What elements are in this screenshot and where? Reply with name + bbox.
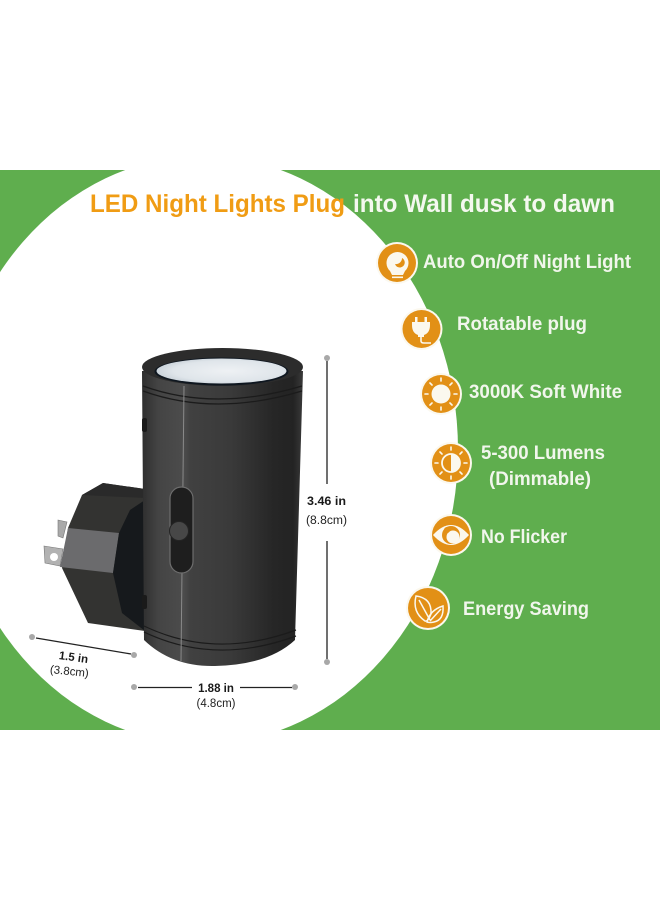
top rim and lens — [142, 348, 303, 386]
title: into Wall dusk to dawn — [353, 190, 615, 218]
label: 3000K Soft White — [469, 382, 622, 403]
icon: eye — [430, 514, 472, 556]
icon: plug — [400, 308, 442, 350]
dimension: width 1.88 in — [131, 683, 298, 710]
green background band — [0, 170, 660, 730]
icon: bulb with moon — [376, 242, 418, 284]
feature: rotatable plug — [400, 308, 587, 350]
icon: sun — [420, 373, 462, 415]
feature: no flicker — [430, 514, 568, 556]
label: Energy Saving — [463, 599, 589, 620]
dimension: height 3.46 in: 3.46 in — [307, 496, 346, 508]
side screws — [142, 418, 147, 609]
white oval backdrop — [0, 156, 458, 744]
icon: leaves — [406, 586, 450, 630]
feature: soft white — [420, 373, 622, 415]
feature: lumens — [430, 442, 605, 490]
feature: energy saving — [406, 586, 589, 630]
dimension: width 1.88 in: (4.8cm) — [197, 698, 236, 710]
slider slot and knob — [170, 487, 193, 573]
octagonal plug base — [60, 483, 145, 631]
seam — [181, 386, 184, 661]
label: Rotatable plug — [457, 314, 587, 335]
title: LED Night Lights Plug — [90, 190, 345, 218]
dimension: depth 1.5 in — [29, 634, 137, 680]
feature: lumens: (Dimmable) — [489, 469, 591, 490]
product: plug-in night light — [44, 348, 303, 666]
dimension: depth 1.5 in: (3.8cm) — [49, 664, 89, 680]
feature: auto on/off — [376, 242, 632, 284]
label: 5-300 Lumens — [481, 443, 605, 464]
title — [90, 190, 615, 218]
dimension: depth 1.5 in: 1.5 in — [58, 650, 89, 666]
dimension: width 1.88 in: 1.88 in — [198, 683, 234, 695]
dimension: height 3.46 in: (8.8cm) — [306, 515, 347, 527]
cylinder body — [142, 371, 303, 666]
icon: half sun — [430, 442, 472, 484]
prongs — [44, 520, 67, 566]
dimension: height 3.46 in — [306, 355, 347, 665]
label: No Flicker — [481, 527, 568, 548]
label: Auto On/Off Night Light — [423, 252, 632, 273]
ring grooves — [143, 386, 302, 650]
